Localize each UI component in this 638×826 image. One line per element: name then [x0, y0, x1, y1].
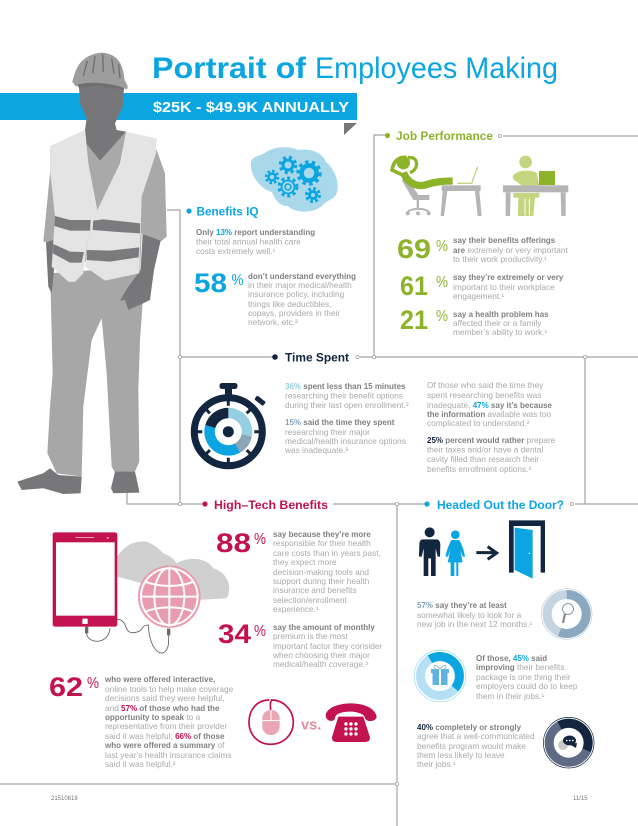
- gear 2: [298, 162, 320, 184]
- icon: mouse vs. telephone: [249, 700, 377, 744]
- text: 88% description: they expect more: [273, 557, 337, 567]
- stat: 61%: [400, 271, 448, 301]
- text: 62% description: said it was helpful.²: [105, 759, 176, 769]
- chair: [402, 178, 431, 215]
- woman: [446, 530, 465, 576]
- text: 58% description: network, etc.²: [248, 317, 298, 327]
- text: 69% description: are extremely or very important: [453, 245, 568, 255]
- text: 34% description: important factor they consider: [273, 641, 383, 651]
- head and neck: [79, 87, 126, 161]
- text: time spent left column: 15% said the time they spent: [285, 418, 394, 427]
- text: 45%: improving their benefits: [476, 662, 564, 672]
- shirt collar: [86, 132, 126, 210]
- text: 34% description: premium is the most: [273, 631, 348, 641]
- text: 40%: benefits program would make: [417, 741, 526, 751]
- stat: 62%: 62: [49, 672, 83, 702]
- heading: High-Tech Benefits: High–Tech Benefits: [214, 498, 328, 512]
- stat: 58%: %: [232, 272, 244, 289]
- text: 62% description: opportunity to speak to a: [105, 712, 200, 722]
- text: 40%: agree that a well-communicated: [417, 731, 535, 741]
- text: time spent right column: Of those who said the time they: [427, 380, 544, 390]
- text: 40%: them less likely to leave: [417, 750, 505, 760]
- door: [509, 520, 545, 579]
- text: 40%: their jobs.¹: [417, 759, 456, 769]
- text: 21% description: say a health problem has: [453, 310, 549, 319]
- stat: 21%: [400, 305, 448, 335]
- text: time spent right column: their taxes and/or have a dental: [427, 444, 543, 454]
- text: time spent right column: 25% percent would rather prepare: [427, 435, 555, 445]
- text: time spent left column: researching their benefit options: [285, 390, 403, 400]
- text: 69% description: to their work productivity.¹: [453, 254, 547, 264]
- text: 58% description: copays, providers in their: [248, 308, 340, 318]
- stat: 58%: [194, 268, 244, 298]
- text: 58% description: in their major medical/health: [248, 280, 352, 290]
- telephone: [326, 703, 377, 742]
- stat: 34%: %: [254, 623, 266, 640]
- text: 88% description: responsible for their health: [273, 538, 371, 548]
- text: 62% description: who were offered interactive,: [104, 675, 215, 684]
- text: 40%: 40% completely or strongly: [417, 723, 521, 732]
- text: Benefits IQ intro: costs extremely well.¹: [196, 246, 276, 256]
- text: time spent left column: 36% spent less than 15 minutes: [285, 382, 406, 391]
- text: 69% description: say their benefits offerings: [453, 236, 556, 245]
- heading: Benefits IQ: Benefits IQ: [196, 204, 258, 218]
- vest left: [50, 130, 97, 282]
- title: Portrait of: [152, 52, 306, 85]
- man: [419, 527, 440, 576]
- text: 45%: them in their jobs.¹: [476, 691, 544, 701]
- text: time spent right column: spent researching benefits was: [427, 390, 541, 400]
- text: time spent right column: benefits enrollment options.²: [427, 464, 531, 474]
- text: 62% description: and 57% of those who had the: [105, 703, 219, 713]
- text: 45%: Of those, 45% said: [476, 654, 547, 663]
- icon: people leaving through door: [419, 520, 545, 579]
- text: time spent right column: the information available was too: [427, 409, 551, 419]
- text: 34% description: say the amount of monthly: [273, 623, 375, 632]
- trousers: [47, 267, 143, 477]
- text: 88% description: experience.¹: [273, 604, 319, 614]
- donut: magnifier 57%: [541, 589, 592, 639]
- stat: 34%: 34: [218, 619, 251, 649]
- footer: date: 11/15: [573, 796, 588, 802]
- stat: 21%: 21: [400, 305, 428, 335]
- icon: workers at desks: [392, 156, 568, 216]
- vest right: [85, 132, 157, 281]
- text: 58% description: things like deductibles,: [248, 299, 331, 309]
- stat: 61%: %: [436, 274, 448, 291]
- text: time spent left column: researching their major: [285, 427, 370, 437]
- right arm: [120, 234, 161, 310]
- text: 21% description: member’s ability to work.¹: [453, 327, 547, 337]
- text: 57%: 57% say they’re at least: [417, 601, 507, 610]
- stat: 88%: %: [254, 531, 266, 548]
- seated worker: [513, 156, 539, 216]
- text: 62% description: online tools to help make coverage: [105, 684, 234, 694]
- text: 58% description: don’t understand everything: [248, 272, 356, 281]
- text: 21% description: affected their or a family: [453, 318, 542, 328]
- heading: Headed Out the Door?: Headed Out the Door?: [437, 498, 564, 512]
- cables: [87, 619, 169, 653]
- text: 88% description: decision-making tools and: [273, 567, 369, 577]
- stat: 61%: 61: [400, 271, 428, 301]
- text: 58% description: insurance policy, including: [248, 289, 345, 299]
- text: 45%: employers could do to keep: [476, 681, 578, 691]
- stat: 62%: [49, 672, 99, 702]
- text: time spent left column: during their last open enrollment.²: [285, 400, 409, 410]
- text: time spent right column: complicated to understand.²: [427, 418, 530, 428]
- text: 61% description: say they’re extremely or very: [453, 273, 564, 282]
- desk left: [441, 185, 482, 216]
- laptop: [457, 167, 478, 183]
- title banner: [0, 93, 357, 135]
- text: 88% description: support during their health: [273, 576, 370, 586]
- mouse: [249, 700, 293, 744]
- stat: 69%: 69: [397, 234, 431, 264]
- tablet: [53, 532, 117, 627]
- donut: speech bubbles 40%: [543, 717, 594, 768]
- text: 62% description: who were offered a summary of: [105, 740, 224, 750]
- text: 88% description: insurance and benefits: [273, 585, 356, 595]
- text: 45%: package is one thing their: [476, 672, 571, 682]
- stat: 69%: [397, 234, 448, 264]
- gear 5: [306, 188, 320, 202]
- text: time spent left column: medical/health insurance options: [285, 436, 406, 446]
- heading: Time Spent: Time Spent: [285, 350, 349, 364]
- text: 61% description: important to their workplace: [453, 282, 555, 292]
- relaxed worker: [392, 156, 453, 186]
- gear 4: [279, 178, 297, 196]
- donut: gift 45%: [414, 650, 466, 702]
- gear 1: [280, 158, 296, 172]
- shirt: [43, 132, 167, 280]
- text: 61% description: engagement.¹: [453, 291, 504, 301]
- icon: tablet, clouds and globe: [53, 532, 229, 653]
- text: 62% description: last year’s health insurance claims: [105, 750, 232, 760]
- stat: 34%: [218, 619, 266, 649]
- heading: Job Performance: Job Performance: [396, 129, 493, 143]
- globe: [138, 566, 200, 628]
- text: 88% description: care costs than in years past,: [273, 548, 381, 558]
- text: 62% description: representative from their provider: [105, 721, 227, 731]
- right shoe: [111, 472, 139, 493]
- stat: 21%: %: [436, 308, 448, 325]
- title: Employees Making: [315, 52, 558, 85]
- hard hat: [72, 53, 128, 89]
- text: time spent right column: cavity filled than research their: [427, 454, 539, 464]
- text: 34% description: medical/health coverage.³: [273, 659, 368, 669]
- monitor: [539, 171, 555, 185]
- vest stripes: [54, 216, 91, 231]
- text: 62% description: decisions said they were helpful,: [105, 693, 224, 703]
- text: 57%: new job in the next 12 months.¹: [417, 619, 533, 629]
- text: Benefits IQ intro: Only 13% report understanding: [196, 228, 315, 237]
- text: time spent right column: inadequate, 47% say it’s because: [427, 400, 552, 410]
- icon: brain with gears: [251, 147, 338, 212]
- left arm: [46, 240, 55, 293]
- icon: stopwatch: [194, 383, 266, 466]
- title banner: $25K - $49.9K ANNUALLY: [153, 99, 349, 116]
- stat: 62%: %: [87, 675, 99, 692]
- text: 57%: somewhat likely to look for a: [417, 610, 522, 620]
- footer: job code: 21510618: [51, 796, 78, 802]
- text: Benefits IQ intro: their total annual health care: [196, 236, 301, 246]
- stat: 88%: [216, 528, 266, 558]
- clouds: [117, 541, 229, 600]
- text: time spent left column: was inadequate.²: [284, 445, 348, 455]
- text: 34% description: when choosing their major: [272, 650, 370, 660]
- arrow: [476, 547, 497, 559]
- vs. label: vs.: [301, 717, 321, 733]
- text: 88% description: selection/enrollment: [273, 595, 347, 605]
- gear 3: [266, 171, 278, 183]
- left shoe: [17, 468, 82, 494]
- worker figure: [17, 53, 167, 494]
- text: 62% description: said it was helpful; 66% of those: [105, 731, 224, 741]
- text: 88% description: say because they’re more: [273, 530, 371, 539]
- desk right: [503, 185, 568, 216]
- stat: 69%: %: [436, 238, 448, 255]
- stat: 58%: 58: [194, 268, 227, 298]
- stat: 88%: 88: [216, 528, 251, 558]
